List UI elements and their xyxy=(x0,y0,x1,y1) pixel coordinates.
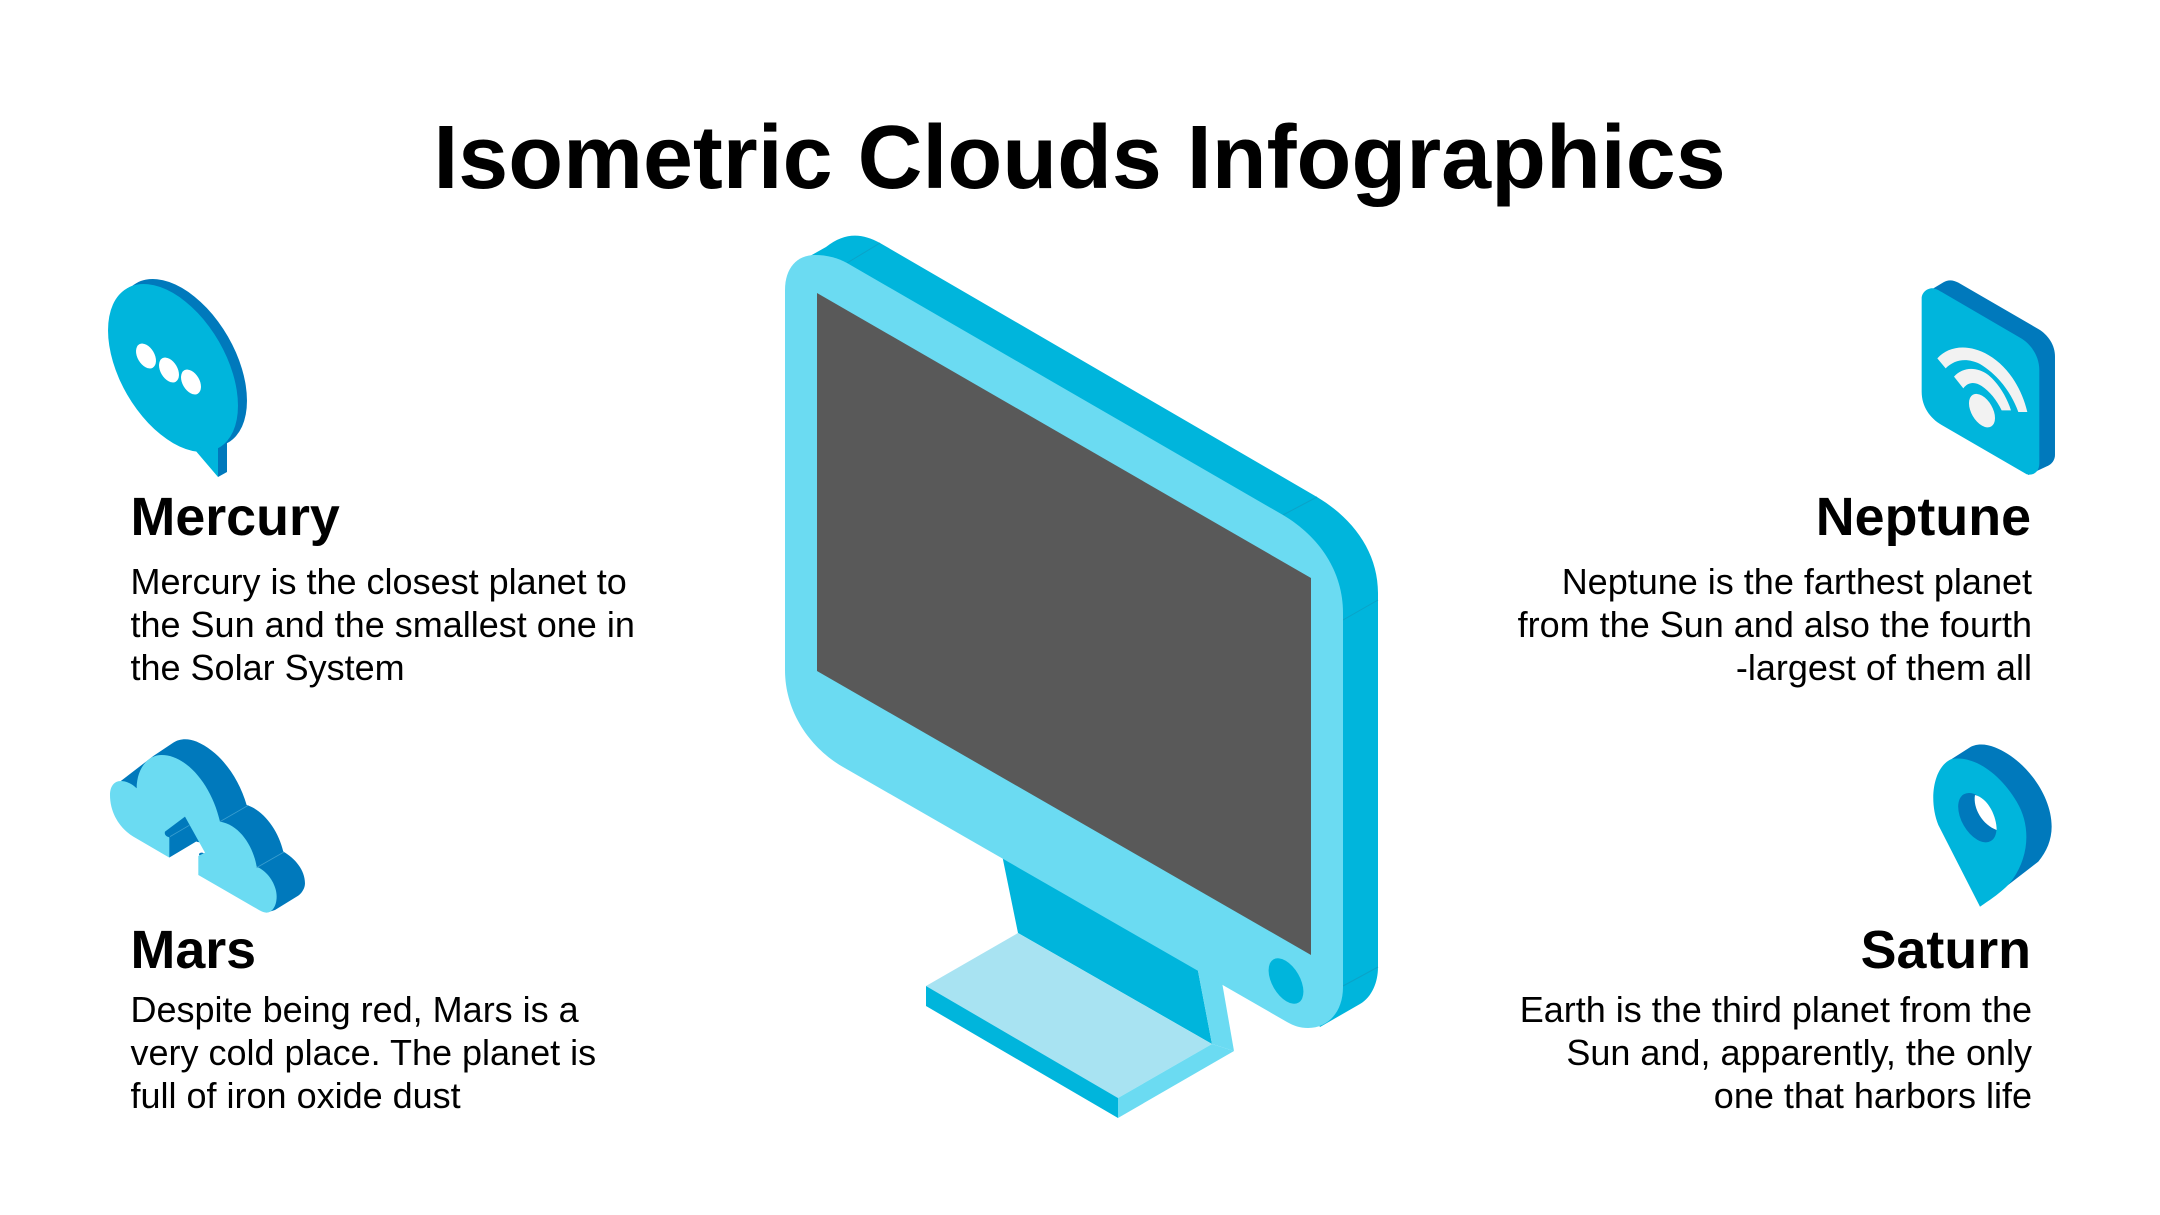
text: Mercury description: Mercury is the closest planet to xyxy=(130,561,627,602)
monitor stand neck xyxy=(1000,845,1234,1051)
text: Mars description: full of iron oxide dust xyxy=(130,1075,461,1116)
text: Saturn description: one that harbors life xyxy=(1714,1075,2032,1116)
icon: speech bubble xyxy=(81,257,274,477)
icon: wifi tile xyxy=(1922,280,2055,475)
monitor base xyxy=(926,933,1234,1118)
text: Neptune description: Neptune is the farthest planet xyxy=(1562,561,2032,602)
text: Mercury description: the Solar System xyxy=(130,647,405,688)
text: Saturn description: Sun and, apparently, the only xyxy=(1566,1032,2032,1073)
heading: Mercury: Mercury xyxy=(130,487,340,547)
title: Isometric Clouds Infographics xyxy=(433,108,1726,208)
monitor back side xyxy=(810,236,1378,1027)
heading: Saturn: Saturn xyxy=(1861,920,2031,980)
text: Saturn description: Earth is the third planet from the xyxy=(1520,989,2032,1030)
monitor power button xyxy=(1261,952,1311,1010)
monitor front bezel xyxy=(785,255,1343,1028)
cloud seams xyxy=(170,805,284,868)
icon: cloud upload xyxy=(110,739,305,913)
text: Mars description: Despite being red, Mars is a xyxy=(130,989,580,1030)
monitor edge seams xyxy=(847,243,1378,986)
text: Neptune description: -largest of them all xyxy=(1736,647,2032,688)
text: Neptune description: from the Sun and also the fourth xyxy=(1518,604,2032,645)
text: Mars description: very cold place. The planet is xyxy=(130,1032,596,1073)
monitor screen xyxy=(817,293,1311,955)
text: Mercury description: the Sun and the smallest one in xyxy=(130,604,635,645)
illustration: isometric monitor xyxy=(785,236,1378,1118)
heading: Mars: Mars xyxy=(130,920,256,980)
heading: Neptune: Neptune xyxy=(1816,487,2031,547)
icon: map pin xyxy=(1933,744,2052,907)
